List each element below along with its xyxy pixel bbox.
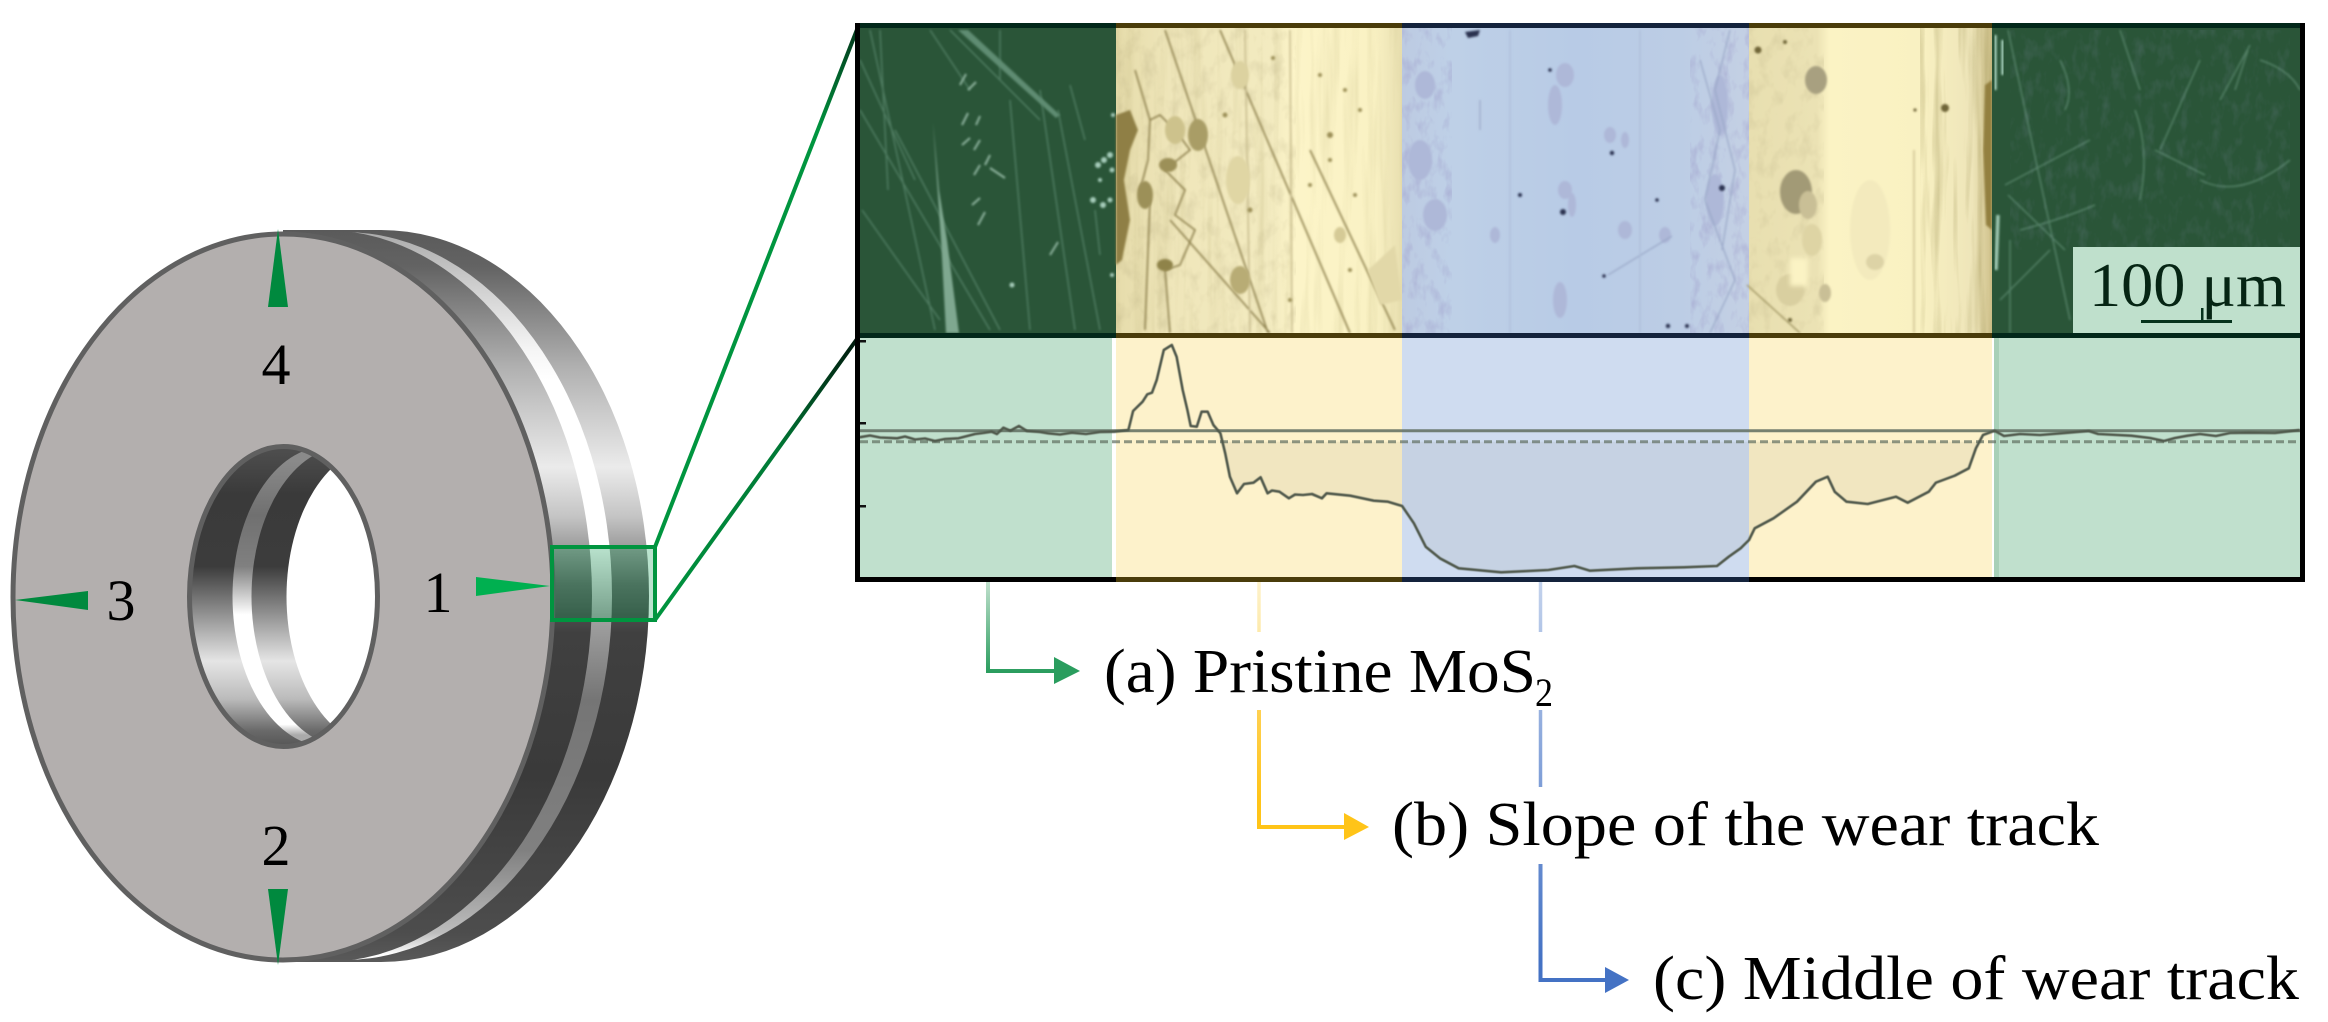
arrow 3 <box>15 591 88 610</box>
connector yellow lower <box>1259 710 1346 827</box>
connector blue upper <box>1539 582 1542 632</box>
disc illustration <box>13 229 655 965</box>
number 1: 1 <box>424 560 452 625</box>
worn slope zone left <box>1116 28 1402 333</box>
disc front face <box>13 234 553 960</box>
label c: (c) Middle of wear track <box>1653 945 2299 1013</box>
surface profile curve <box>859 345 2300 572</box>
shaded wear area <box>1222 442 1978 572</box>
connector blue centre <box>1539 710 1542 787</box>
connector blue lower <box>1540 864 1607 980</box>
arrow 1 <box>476 577 550 596</box>
subscript: 2 <box>1535 670 1553 715</box>
scale label: 100 μm <box>2089 252 2286 320</box>
panel: micrograph <box>860 28 2302 333</box>
arrow head blue <box>1605 967 1629 993</box>
centre hole <box>192 449 375 744</box>
panel frame <box>857 23 2303 582</box>
number 3: 3 <box>106 568 136 633</box>
arrow head green <box>1054 657 1080 684</box>
arrow 4 <box>268 229 288 307</box>
callout: pristine <box>988 582 1553 715</box>
callout: middle <box>1540 582 2299 1013</box>
reference line dashed <box>860 440 2300 443</box>
label a: (a) Pristine MoS <box>1104 638 1536 706</box>
number 2: 2 <box>262 813 290 878</box>
disc rim: wear track band <box>283 232 612 960</box>
connector yellow upper <box>1257 582 1261 632</box>
disc rim: inner band <box>283 230 592 962</box>
arrow head yellow <box>1344 813 1369 840</box>
yellow zone right <box>1749 338 1992 578</box>
arrow 2 <box>268 889 288 965</box>
green zone left <box>860 338 1112 578</box>
reference line solid <box>860 429 2300 432</box>
pristine zone left <box>860 28 1116 333</box>
y axis ticks <box>860 340 866 508</box>
worn slope zone right <box>1747 28 1992 333</box>
bright patch <box>1790 258 1808 286</box>
zoom line lower <box>655 339 857 620</box>
zoom line upper <box>655 27 858 547</box>
pristine zone right <box>1992 28 2302 333</box>
connector green <box>988 582 1056 671</box>
yellow zone left <box>1116 338 1402 578</box>
green zone right <box>1994 338 2300 578</box>
scale bar box <box>2073 247 2302 333</box>
panel: height profile <box>859 338 2300 578</box>
callout: slope <box>1259 582 2099 859</box>
highlighted measuring region <box>552 547 655 620</box>
disc rim: outer band <box>283 230 649 962</box>
label b: (b) Slope of the wear track <box>1392 791 2099 859</box>
middle zone <box>1402 28 1749 333</box>
number 4: 4 <box>262 332 290 397</box>
blue zone <box>1402 338 1749 578</box>
